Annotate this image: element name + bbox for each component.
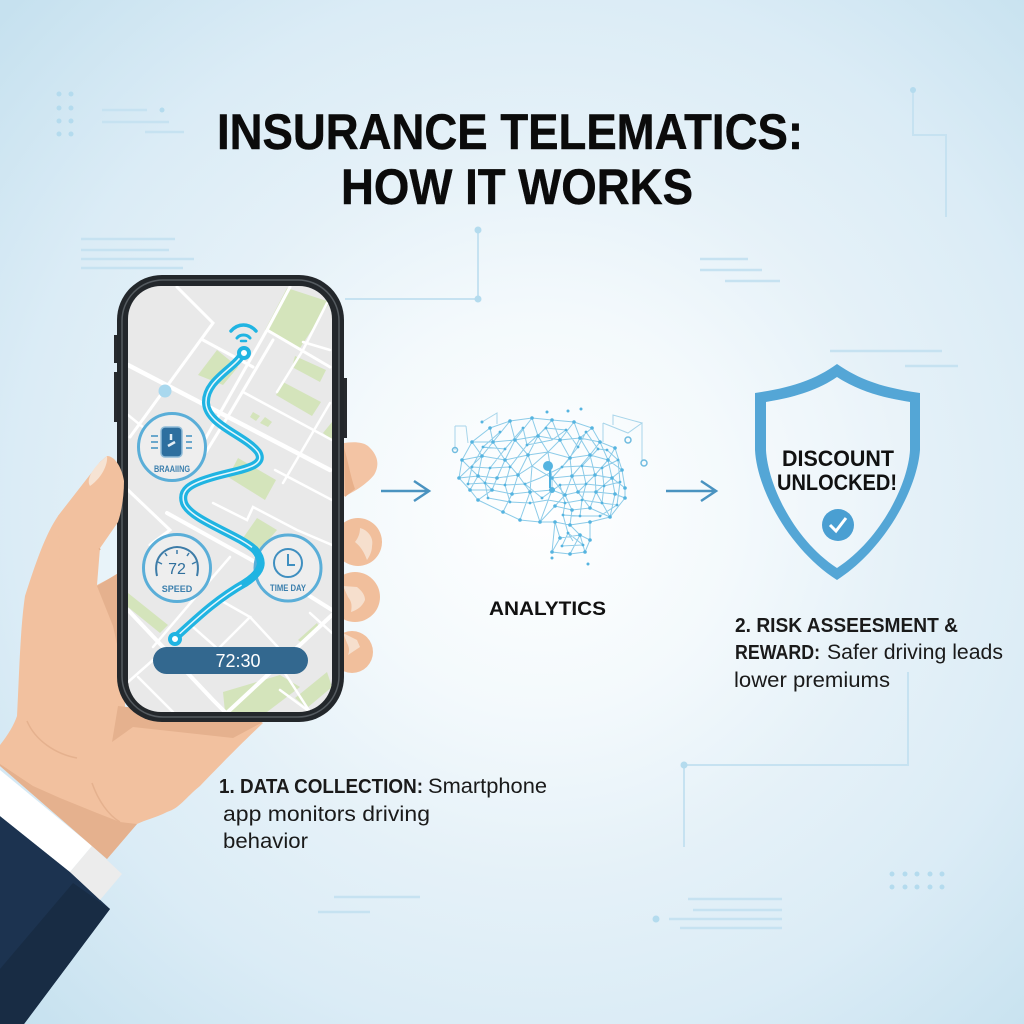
badge: speed gauge <box>144 534 210 602</box>
icon: discount shield: DISCOUNT <box>782 446 894 471</box>
step 2 text <box>734 615 1003 692</box>
palm shading <box>0 572 263 859</box>
suit sleeve <box>0 816 110 1024</box>
route start and end markers <box>170 348 249 644</box>
step 1 text: app monitors driving <box>223 802 430 826</box>
badge: speed gauge: 72 <box>168 561 186 578</box>
step 1 text: Smartphone <box>428 774 547 798</box>
thumb nail <box>89 456 107 486</box>
arrow: to analytics <box>381 481 429 501</box>
phone <box>114 275 347 722</box>
icon: discount shield <box>755 364 920 580</box>
analytics label: ANALYTICS <box>489 599 606 620</box>
shirt cuff <box>0 770 122 900</box>
step 2 text: Safer driving leads <box>827 640 1003 664</box>
step 1 text <box>219 774 547 853</box>
fingers <box>330 442 382 673</box>
step 2 text: 2. RISK ASSEESMENT & <box>735 615 958 637</box>
title: HOW IT WORKS <box>341 159 693 215</box>
badge: time of day: TIME DAY <box>270 583 306 593</box>
step 2 text: lower premiums <box>734 668 890 692</box>
step 1 text: 1. DATA COLLECTION: <box>219 776 423 798</box>
icon: wifi signal <box>231 325 256 341</box>
map <box>128 287 332 722</box>
badge: time of day <box>255 535 321 601</box>
trip time bar: 72:30 <box>215 651 261 671</box>
title: INSURANCE TELEMATICS: <box>217 104 803 160</box>
badge: braking <box>138 414 206 480</box>
hand creases <box>27 538 120 822</box>
icon: discount shield: UNLOCKED! <box>777 470 897 495</box>
step 2 text: REWARD: <box>735 642 820 664</box>
hand palm <box>0 456 263 859</box>
step 1 text: behavior <box>223 829 308 853</box>
route crossing over time badge <box>245 550 261 583</box>
badge: braking: BRAAIING <box>154 464 190 475</box>
icon: analytics brain <box>452 408 647 566</box>
trip time bar <box>153 647 308 674</box>
thumb <box>58 456 124 560</box>
route line <box>175 353 261 638</box>
gap between thumb and palm <box>97 522 118 585</box>
badge: speed gauge: SPEED <box>162 584 193 594</box>
arrow: to shield <box>666 481 716 501</box>
title <box>217 104 803 215</box>
